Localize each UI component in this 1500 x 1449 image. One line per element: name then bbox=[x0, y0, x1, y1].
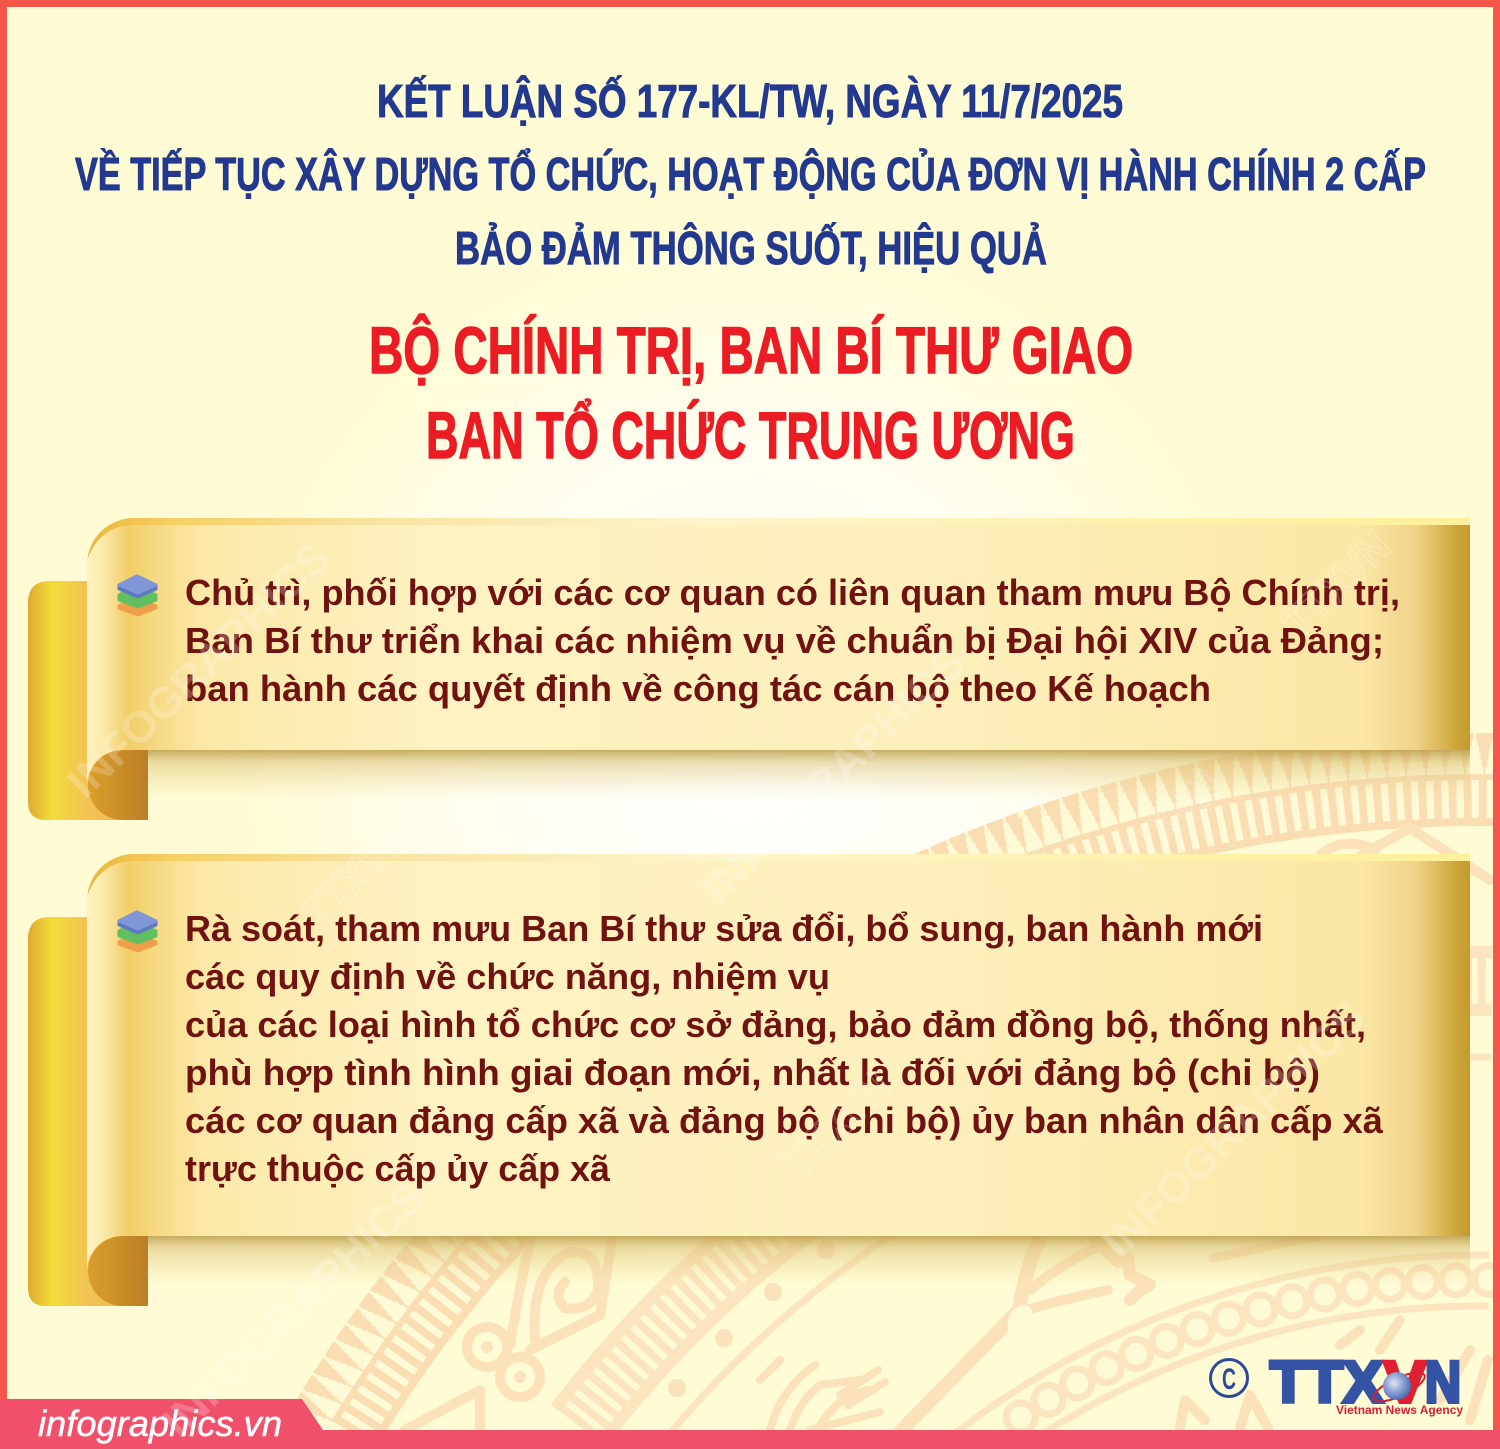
heading: BẢO ĐẢM THÔNG SUỐT, HIỆU QUẢ bbox=[455, 222, 1047, 274]
copyright mark: C bbox=[1222, 1363, 1236, 1396]
banner 2 shadow bbox=[148, 1236, 1470, 1286]
banner 2 top edge bbox=[87, 854, 1470, 901]
watermark: TTXVN bbox=[1273, 522, 1400, 647]
banner 1 body bbox=[87, 525, 1470, 785]
banner 2 text: các cơ quan đảng cấp xã và đảng bộ (chi bộ) ủy ban nhân dân cấp xã bbox=[185, 1100, 1384, 1141]
logo letters: N bbox=[1425, 1350, 1461, 1415]
icon: layers bbox=[119, 576, 156, 615]
banner 1 curl bbox=[88, 750, 148, 820]
bronze drum pattern bbox=[284, 736, 1494, 1444]
footer site name: infographics.vn bbox=[38, 1403, 282, 1444]
banner 1 text bbox=[185, 572, 1400, 709]
banner 2 text: phù hợp tình hình giai đoạn mới, nhất là đối với đảng bộ (chi bộ) bbox=[185, 1052, 1320, 1093]
banner 2 text: các quy định về chức năng, nhiệm vụ bbox=[185, 956, 830, 997]
banner 1 text: Chủ trì, phối hợp với các cơ quan có liên quan tham mưu Bộ Chính trị, bbox=[185, 572, 1400, 613]
scroll banner 1 bbox=[28, 518, 1470, 820]
footer bar bbox=[0, 1399, 1500, 1449]
banner 1 top edge bbox=[87, 518, 1470, 565]
watermark: INFOGRAPHICS bbox=[153, 1172, 435, 1447]
banner 2 curl bbox=[88, 1236, 148, 1306]
copyright mark bbox=[1210, 1360, 1248, 1396]
TTXVN logo bbox=[1210, 1350, 1464, 1417]
banner 1 text: ban hành các quyết định về công tác cán bộ theo Kế hoạch bbox=[185, 668, 1211, 709]
logo letters: V bbox=[1384, 1350, 1426, 1415]
watermark: INFOGRAPHICS bbox=[58, 532, 340, 807]
banner 2 text: của các loại hình tổ chức cơ sở đảng, bảo đảm đồng bộ, thống nhất, bbox=[185, 1004, 1366, 1045]
banner 2 text: trực thuộc cấp ủy cấp xã bbox=[185, 1148, 611, 1189]
banner 2 text: Rà soát, tham mưu Ban Bí thư sửa đổi, bổ sung, ban hành mới bbox=[185, 908, 1263, 949]
watermark: INFOGRAPHICS bbox=[693, 637, 975, 912]
banner 1 shadow bbox=[148, 750, 1470, 800]
banner 1 text: Ban Bí thư triển khai các nhiệm vụ về chuẩn bị Đại hội XIV của Đảng; bbox=[185, 620, 1384, 661]
heading: KẾT LUẬN SỐ 177-KL/TW, NGÀY 11/7/2025 bbox=[377, 75, 1123, 127]
watermark: INFOGRAPHICS bbox=[1093, 992, 1375, 1267]
logo letters bbox=[1270, 1350, 1461, 1415]
agency name: Vietnam News Agency bbox=[1336, 1405, 1464, 1417]
scroll banner 2 bbox=[28, 854, 1470, 1306]
banner 2 body bbox=[87, 861, 1470, 1271]
subheading: BỘ CHÍNH TRỊ, BAN BÍ THƯ GIAO bbox=[369, 313, 1133, 387]
watermark: TTXVN bbox=[293, 812, 420, 937]
watermark bbox=[58, 522, 1400, 1447]
logo letters: TTX bbox=[1270, 1350, 1383, 1415]
globe bbox=[1370, 1367, 1428, 1407]
banner 1 back roll bbox=[28, 581, 148, 820]
subheading bbox=[369, 313, 1133, 472]
banner 2 text bbox=[185, 908, 1384, 1189]
heading bbox=[75, 75, 1426, 274]
banner 2 back roll bbox=[28, 917, 148, 1306]
icon: layers bbox=[119, 912, 156, 951]
subheading: BAN TỔ CHỨC TRUNG ƯƠNG bbox=[426, 398, 1075, 472]
watermark: TTXVN bbox=[1103, 762, 1230, 887]
watermark: TTXVN bbox=[773, 1062, 900, 1187]
